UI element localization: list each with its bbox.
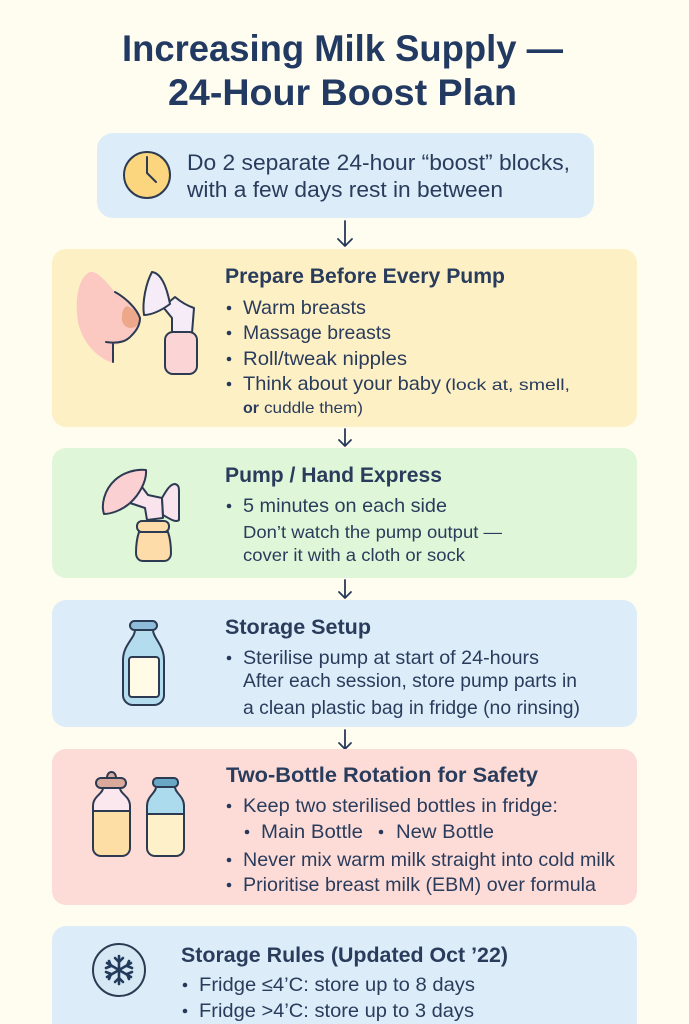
arrow: pump to storage <box>339 580 351 598</box>
panel: two-bottle rotation <box>52 749 637 905</box>
icon: snowflake <box>93 944 145 996</box>
title: 24-Hour Boost Plan <box>168 72 517 113</box>
arrow: intro to prepare <box>338 221 352 246</box>
prepare text: Think about your baby <box>243 373 441 395</box>
prepare text: Massage breasts <box>243 322 391 344</box>
panel: pump / hand express <box>52 448 637 578</box>
prepare text: Warm breasts <box>243 297 366 319</box>
prepare text: Prepare Before Every Pump <box>225 265 505 288</box>
intro text: with a few days rest in between <box>186 177 503 202</box>
rotation text: New Bottle <box>396 821 494 843</box>
title: Increasing Milk Supply — <box>122 28 563 69</box>
storage rules text <box>181 944 508 1022</box>
icon: new bottle <box>147 778 184 856</box>
storage rules text: Storage Rules (Updated Oct ’22) <box>181 944 508 967</box>
pump text: cover it with a cloth or sock <box>243 545 465 565</box>
panel: prepare before every pump <box>52 249 637 427</box>
rotation text: Keep two sterilised bottles in fridge: <box>243 795 558 817</box>
icon: breast pump <box>143 272 197 374</box>
arrow: prepare to pump <box>339 429 351 446</box>
rotation text: Two-Bottle Rotation for Safety <box>226 764 538 787</box>
storage rules text: Fridge ≤4’C: store up to 8 days <box>199 974 475 996</box>
intro text: Do 2 separate 24-hour “boost” blocks, <box>187 150 570 175</box>
pump text: Don’t watch the pump output — <box>243 522 503 542</box>
prepare text: (lock at, smell, <box>445 377 570 394</box>
rotation text: Never mix warm milk straight into cold milk <box>243 849 615 871</box>
storage setup text: a clean plastic bag in fridge (no rinsing) <box>243 697 580 719</box>
rotation text: Prioritise breast milk (EBM) over formula <box>243 874 596 896</box>
rotation text: Main Bottle <box>261 821 363 843</box>
pump text: 5 minutes on each side <box>243 495 447 517</box>
rotation text <box>226 764 615 896</box>
icon: clock <box>124 152 170 198</box>
pump text <box>225 464 503 565</box>
storage setup text: After each session, store pump parts in <box>243 670 577 692</box>
icon: breast <box>77 272 140 363</box>
storage rules text: Fridge >4’C: store up to 3 days <box>199 1000 474 1022</box>
arrow: storage to rotation <box>339 730 351 749</box>
storage setup text <box>225 616 580 719</box>
storage setup text: Sterilise pump at start of 24-hours <box>243 647 539 669</box>
title <box>122 28 563 113</box>
panel: storage setup <box>52 600 637 727</box>
icon: main bottle <box>93 772 130 856</box>
icon: pump with jar <box>103 470 179 561</box>
prepare text: cuddle them) <box>264 400 363 417</box>
icon: milk bottle <box>123 621 164 705</box>
prepare text <box>225 265 570 417</box>
pump text: Pump / Hand Express <box>225 464 442 487</box>
panel: storage rules <box>52 926 637 1024</box>
panel: intro <box>97 133 594 218</box>
prepare text: Roll/tweak nipples <box>243 348 407 370</box>
intro text <box>186 150 570 202</box>
prepare text: or <box>243 400 259 417</box>
storage setup text: Storage Setup <box>225 616 371 639</box>
